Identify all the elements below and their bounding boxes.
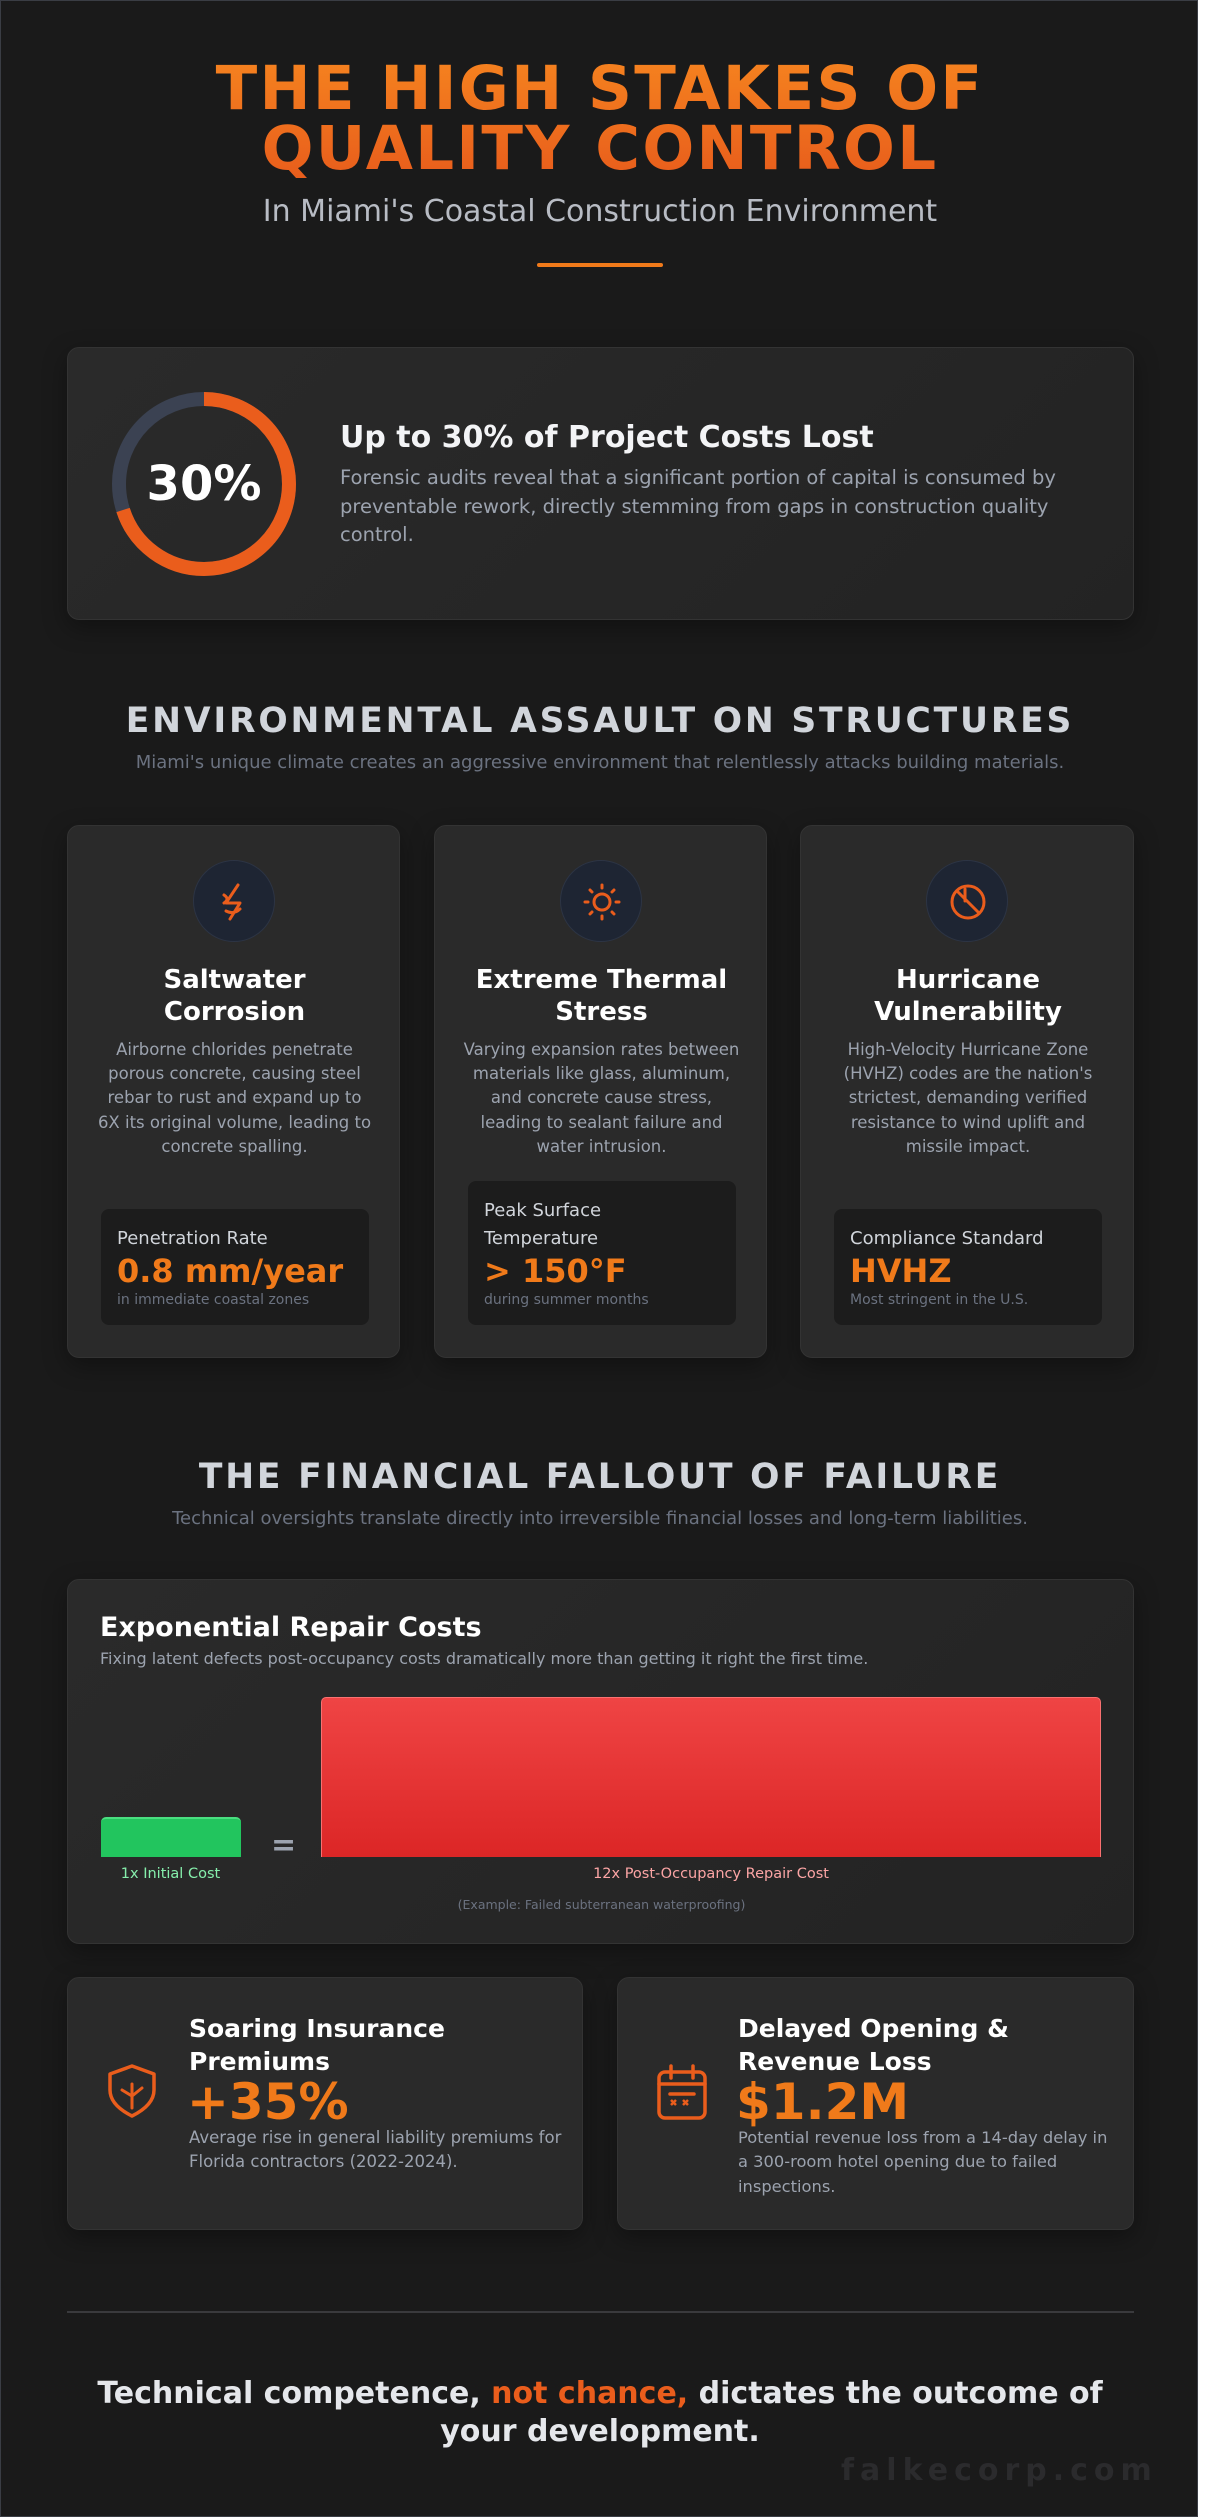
text: Potential revenue loss from a 14-day delay in a 300-room hotel opening due to failed inspections. xyxy=(738,2128,1107,2196)
chart title: Exponential Repair Costs xyxy=(100,1612,482,1643)
title xyxy=(1,59,1199,179)
title: THE HIGH STAKES OF xyxy=(216,53,984,124)
title: QUALITY CONTROL xyxy=(262,113,938,184)
equals sign: = xyxy=(271,1828,296,1863)
stat box xyxy=(834,1209,1102,1325)
body text: Forensic audits reveal that a significant portion of capital is consumed by preventable rework, directly stemming from gaps in construction quality control. xyxy=(340,466,1056,546)
title: Revenue Loss xyxy=(738,2047,932,2076)
panel: hurricane xyxy=(800,825,1134,1358)
bar: initial cost xyxy=(101,1817,241,1857)
icon: corrosion xyxy=(193,860,275,942)
title: Premiums xyxy=(189,2047,330,2076)
stat box: Compliance Standard xyxy=(850,1228,1044,1249)
title: Soaring Insurance xyxy=(189,2014,445,2043)
stat box xyxy=(101,1209,369,1325)
heading: environmental assault: ENVIRONMENTAL ASSAULT ON STRUCTURES xyxy=(126,701,1074,741)
subheading: Miami's unique climate creates an aggressive environment that relentlessly attacks building materials. xyxy=(136,752,1064,773)
label: initial: 1x Initial Cost xyxy=(121,1866,220,1882)
stat box: during summer months xyxy=(484,1292,649,1308)
heading: financial fallout: THE FINANCIAL FALLOUT OF FAILURE xyxy=(199,1457,1001,1497)
chart subtitle: Fixing latent defects post-occupancy costs dramatically more than getting it right the first time. xyxy=(100,1649,868,1668)
card title: Hurricane xyxy=(896,965,1040,995)
stat box: Penetration Rate xyxy=(117,1228,268,1249)
title xyxy=(738,2014,1009,2076)
stat box: > 150°F xyxy=(484,1252,627,1290)
panel: delayed opening xyxy=(617,1977,1134,2230)
card text: Airborne chlorides penetrate porous concrete, causing steel rebar to rust and expand up to 6X its original volume, leading to concrete spalling. xyxy=(98,1040,371,1156)
text: Average rise in general liability premiums for Florida contractors (2022-2024). xyxy=(189,2128,561,2171)
bar: repair cost xyxy=(321,1697,1101,1857)
donut chart 30%: 30% xyxy=(147,456,261,512)
card title: Vulnerability xyxy=(874,997,1062,1027)
example note: (Example: Failed subterranean waterproofing) xyxy=(458,1897,745,1912)
value: +35% xyxy=(187,2073,349,2131)
panel: saltwater corrosion xyxy=(67,825,400,1358)
stat box: 0.8 mm/year xyxy=(117,1252,343,1290)
closing quote: Technical competence, not chance, dictates the outcome of your development. xyxy=(97,2376,1103,2449)
panel: insurance premiums xyxy=(67,1977,583,2230)
stat box xyxy=(468,1181,736,1325)
card title: Extreme Thermal xyxy=(476,965,727,995)
title: Delayed Opening & xyxy=(738,2014,1009,2043)
card title xyxy=(476,965,727,1027)
value: $1.2M xyxy=(736,2073,909,2131)
subtitle: In Miami's Coastal Construction Environment xyxy=(263,194,937,229)
card text: High-Velocity Hurricane Zone (HVHZ) codes are the nation's strictest, demanding verified resistance to wind uplift and missile impact. xyxy=(844,1040,1092,1156)
icon: shield xyxy=(108,2064,156,2118)
panel: 30% costs lost xyxy=(67,347,1134,620)
card text: Varying expansion rates between materials like glass, aluminum, and concrete cause stress, leading to sealant failure and water intrusion. xyxy=(464,1040,739,1156)
stat box: Peak Surface xyxy=(484,1200,601,1221)
card title: Corrosion xyxy=(164,997,305,1027)
icon: calendar xyxy=(657,2064,707,2120)
stat box: in immediate coastal zones xyxy=(117,1292,309,1308)
panel: repair costs chart xyxy=(67,1579,1134,1944)
card title xyxy=(874,965,1062,1027)
stat box: Temperature xyxy=(484,1228,598,1249)
card title: Saltwater xyxy=(163,965,306,995)
icon: no wind xyxy=(926,860,1008,942)
stat box: Most stringent in the U.S. xyxy=(850,1292,1028,1308)
title xyxy=(189,2014,445,2076)
subheading: Technical oversights translate directly into irreversible financial losses and long-term liabilities. xyxy=(172,1508,1028,1529)
title underline xyxy=(537,263,663,267)
watermark: falkecorp.com xyxy=(841,2453,1158,2488)
heading: Up to 30% of Project Costs Lost xyxy=(340,420,874,455)
card title xyxy=(163,965,306,1027)
stat box: HVHZ xyxy=(850,1252,952,1290)
donut chart 30% xyxy=(112,392,296,576)
label: repair: 12x Post-Occupancy Repair Cost xyxy=(593,1866,829,1882)
card title: Stress xyxy=(555,997,648,1027)
icon: sun xyxy=(560,860,642,942)
panel: thermal stress xyxy=(434,825,767,1358)
